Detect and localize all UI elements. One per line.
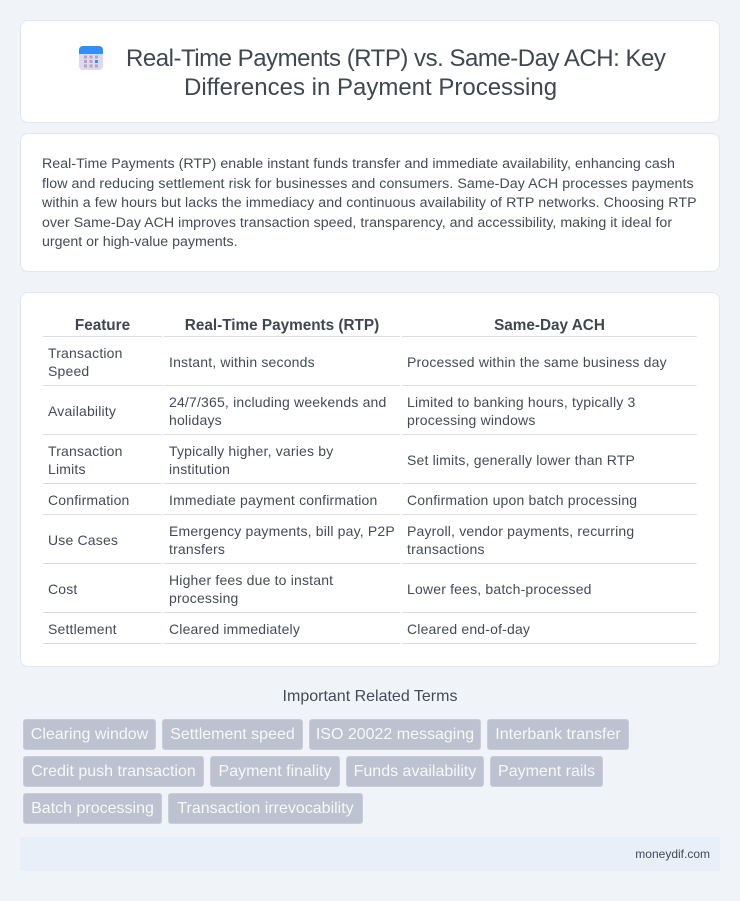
comparison table: transactions xyxy=(407,541,485,557)
comparison table: Cost xyxy=(48,581,78,597)
intro text: urgent or high-value payments. xyxy=(42,234,238,250)
related terms tags: Funds availability xyxy=(354,763,476,780)
comparison table: holidays xyxy=(169,412,222,428)
related terms tags: Payment finality xyxy=(219,763,331,780)
footer source: moneydif.com xyxy=(635,847,710,861)
intro text: over Same-Day ACH improves transaction speed, transparency, and accessibility, making it ideal for xyxy=(42,214,672,230)
comparison table: Cleared end-of-day xyxy=(407,621,530,637)
comparison table: Emergency payments, bill pay, P2P xyxy=(169,523,395,539)
related terms tags: Credit push transaction xyxy=(31,763,196,780)
comparison table: Speed xyxy=(48,363,89,379)
footer bar xyxy=(20,837,720,871)
related terms heading: Important Related Terms xyxy=(283,688,457,705)
header card xyxy=(20,20,720,123)
comparison table: 24/7/365, including weekends and xyxy=(169,394,386,410)
comparison table: transfers xyxy=(169,541,225,557)
comparison table: Limited to banking hours, typically 3 xyxy=(407,394,635,410)
title: Real-Time Payments (RTP) vs. Same-Day ACH: Key xyxy=(126,45,665,72)
comparison table: Transaction xyxy=(48,443,123,459)
comparison table: Confirmation upon batch processing xyxy=(407,492,637,508)
title xyxy=(126,45,666,101)
intro text: Real-Time Payments (RTP) enable instant funds transfer and immediate availability, enhancing cash xyxy=(42,156,675,172)
related terms tags: Interbank transfer xyxy=(495,726,621,743)
comparison table: Higher fees due to instant xyxy=(169,572,333,588)
related terms tags: Transaction irrevocability xyxy=(177,800,354,817)
intro text: within a few hours but lacks the immediacy and continuous availability of RTP networks. Choosing RTP xyxy=(42,195,697,211)
comparison table: Cleared immediately xyxy=(169,621,300,637)
comparison table: Transaction xyxy=(48,345,123,361)
intro text xyxy=(42,156,697,250)
comparison table: Same-Day ACH xyxy=(494,317,605,334)
intro panel xyxy=(20,133,720,272)
comparison table: Settlement xyxy=(48,621,117,637)
comparison table: processing windows xyxy=(407,412,536,428)
comparison table: Availability xyxy=(48,403,116,419)
related terms tags: Clearing window xyxy=(31,726,148,743)
table panel xyxy=(20,292,720,667)
title: Differences in Payment Processing xyxy=(184,74,557,101)
comparison table: Use Cases xyxy=(48,532,118,548)
comparison table: Instant, within seconds xyxy=(169,354,315,370)
related terms tags: Batch processing xyxy=(31,800,154,817)
comparison table: Confirmation xyxy=(48,492,130,508)
comparison table: Lower fees, batch-processed xyxy=(407,581,592,597)
related terms tags: ISO 20022 messaging xyxy=(316,726,474,743)
intro text: flow and reducing settlement risk for businesses and consumers. Same-Day ACH processes payments xyxy=(42,176,694,192)
related terms tags xyxy=(23,719,629,824)
comparison table xyxy=(43,317,697,644)
related terms tags: Payment rails xyxy=(498,763,595,780)
comparison table: Payroll, vendor payments, recurring xyxy=(407,523,634,539)
comparison table: Typically higher, varies by xyxy=(169,443,333,459)
comparison table: institution xyxy=(169,461,230,477)
comparison table: Feature xyxy=(75,317,130,334)
comparison table: Real-Time Payments (RTP) xyxy=(185,317,379,334)
comparison table: Limits xyxy=(48,461,86,477)
comparison table: processing xyxy=(169,590,239,606)
comparison table: Set limits, generally lower than RTP xyxy=(407,452,635,468)
comparison table: Processed within the same business day xyxy=(407,354,667,370)
comparison table: Immediate payment confirmation xyxy=(169,492,378,508)
icon: calendar xyxy=(79,46,103,70)
related terms tags: Settlement speed xyxy=(170,726,295,743)
